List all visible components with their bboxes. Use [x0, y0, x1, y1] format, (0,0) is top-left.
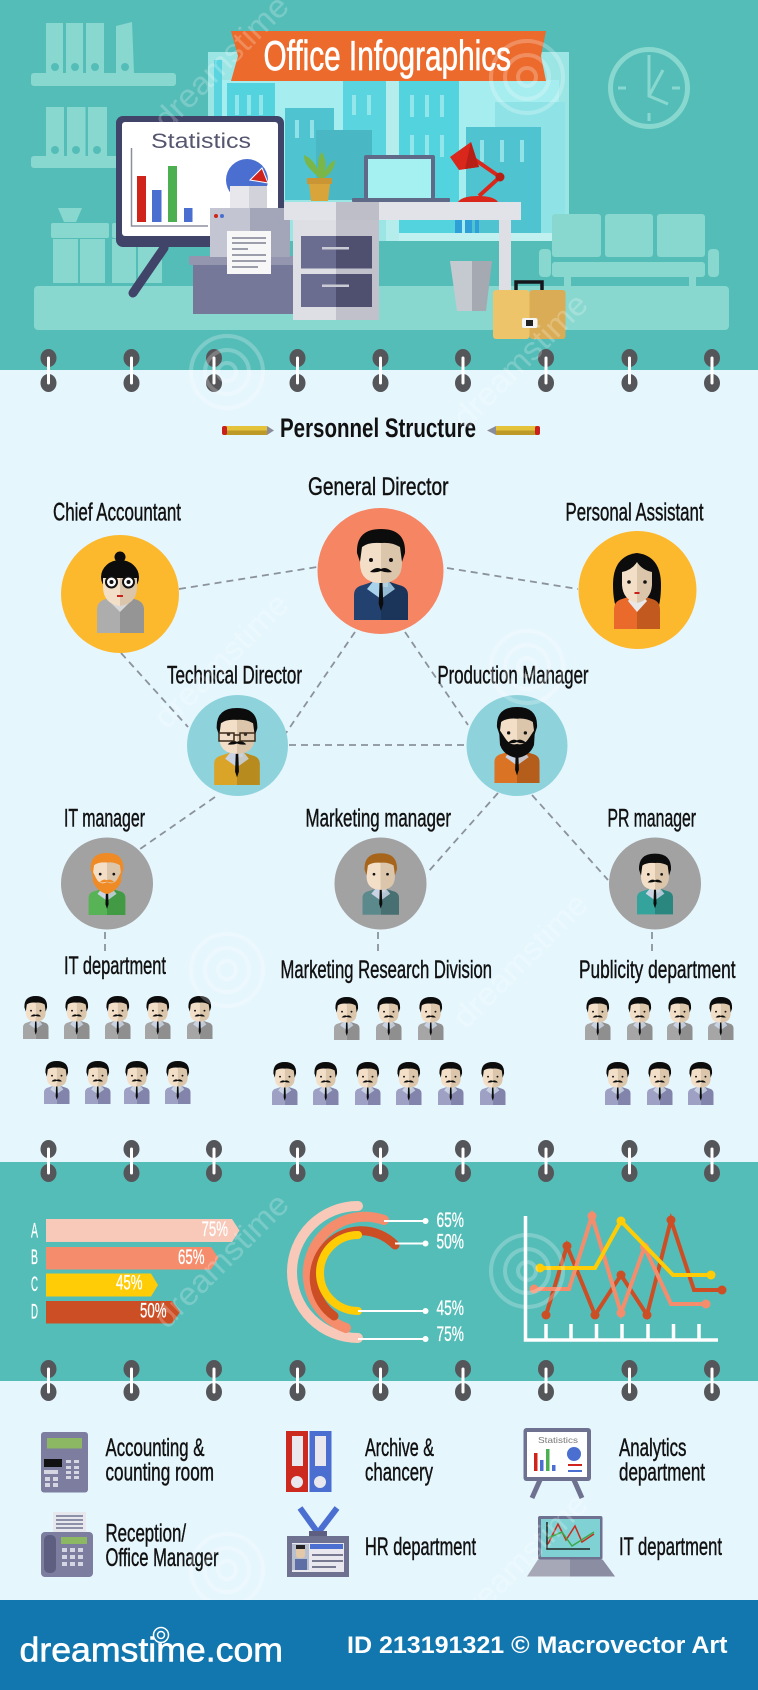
role: Personal Assistant: [566, 498, 704, 649]
waste bin: [450, 261, 492, 311]
spiral binding rings: [40, 349, 720, 1401]
text: HR department: HR department: [365, 1533, 476, 1561]
text: Accounting & counting room: Accounting &: [106, 1434, 205, 1462]
role: General Director: General Director: [308, 473, 448, 501]
text: Accounting & counting room: [106, 1434, 214, 1486]
role: Technical Director: Technical Director: [167, 662, 302, 690]
window with city view: [208, 52, 569, 241]
icon: statistics board: Statistics: [538, 1435, 578, 1445]
bar chart: D: [31, 1300, 38, 1324]
staff: Marketing Research Division: [272, 997, 506, 1105]
bar chart: 75%: [202, 1218, 228, 1241]
icon: fax machine: [41, 1512, 93, 1577]
footer credit: ID 213191321 © Macrovector Art: [347, 1632, 728, 1659]
role: Chief Accountant: Chief Accountant: [53, 498, 181, 526]
panel: office header scene: [0, 0, 758, 370]
bar chart: B: [31, 1246, 38, 1269]
radial arc chart: 65%: [436, 1209, 464, 1232]
stock watermark: dreamstime: [445, 886, 595, 1035]
statistics board: [116, 116, 284, 293]
role: General Director: [308, 473, 448, 634]
role: Chief Accountant: [53, 498, 181, 653]
text: Analytics department: Analytics: [619, 1434, 686, 1462]
radial arc chart: [292, 1206, 464, 1346]
text: Reception / Office Manager: Reception/: [106, 1520, 186, 1548]
sofa: [539, 214, 719, 287]
stock watermark: dreamstime: [146, 1186, 296, 1335]
icon: calculator: [41, 1432, 88, 1492]
role: Marketing manager: [306, 804, 451, 930]
role: PR manager: PR manager: [608, 804, 696, 832]
desk with drawers: [284, 202, 521, 320]
wall clock: [610, 50, 688, 126]
text: Accounting & counting room: counting room: [106, 1458, 214, 1486]
text: Archive & chancery: [365, 1434, 434, 1486]
role: Marketing manager: Marketing manager: [306, 804, 451, 832]
role: IT manager: IT manager: [64, 804, 145, 832]
stock watermark: dreamstime: [445, 286, 595, 435]
text: Analytics department: department: [619, 1458, 705, 1486]
text: Archive & chancery: chancery: [365, 1458, 433, 1486]
role: Technical Director: [167, 662, 302, 796]
panel: departments legend: [41, 1428, 722, 1577]
section heading: Personnel Structure: Personnel Structure: [280, 413, 476, 443]
potted plant: [304, 152, 335, 201]
briefcase: [493, 282, 566, 339]
footer logo: dreamstime.com: [20, 1632, 283, 1670]
icon: statistics board: [524, 1428, 591, 1498]
icon: ID badge: [287, 1508, 349, 1577]
bar chart: [31, 1218, 240, 1324]
stock watermark: dreamstime: [146, 586, 296, 735]
icon: right pencil: [487, 426, 540, 435]
board title: Statistics: [151, 130, 251, 153]
line chart: [526, 1212, 726, 1340]
radial arc chart: 45%: [436, 1297, 464, 1320]
cabinet and printer: [189, 186, 295, 314]
org chart connector lines: [105, 567, 652, 956]
stock watermark: [146, 0, 595, 1635]
text: Analytics department: [619, 1434, 705, 1486]
bar chart: 45%: [116, 1272, 142, 1294]
icon: left pencil: [222, 426, 274, 435]
text: Archive & chancery: Archive &: [365, 1434, 434, 1462]
text: Reception / Office Manager: [106, 1520, 218, 1572]
icon: laptop with chart: [527, 1516, 615, 1576]
radial arc chart: 75%: [436, 1323, 464, 1346]
title banner: Office Infographics: [264, 32, 511, 79]
background cabinet and cup: [51, 208, 162, 283]
role: Production Manager: [438, 662, 588, 796]
radial arc chart: 50%: [436, 1230, 464, 1254]
label: Marketing Research Division: Marketing Research Division: [280, 956, 492, 984]
text: Reception / Office Manager: Office Manager: [106, 1544, 218, 1572]
staff: Publicity department: [585, 997, 734, 1105]
role: Production Manager: Production Manager: [438, 662, 588, 690]
staff: IT department: [23, 996, 212, 1104]
panel: charts band: [0, 1162, 758, 1381]
role: PR manager: [608, 804, 701, 930]
desk lamp: [450, 142, 504, 202]
bar chart: C: [31, 1273, 38, 1296]
laptop: [352, 155, 450, 202]
icon: binders: [286, 1431, 332, 1492]
bar chart: 65%: [178, 1246, 204, 1269]
footer bar: [0, 1600, 758, 1690]
label: IT department: IT department: [64, 952, 166, 980]
floor platform: [34, 286, 729, 330]
role: IT manager: [61, 804, 153, 930]
bar chart: A: [31, 1220, 38, 1242]
bar chart: 50%: [140, 1300, 166, 1322]
background shelves with binders: [31, 22, 176, 168]
stock watermark: dreamstime: [445, 1486, 595, 1635]
